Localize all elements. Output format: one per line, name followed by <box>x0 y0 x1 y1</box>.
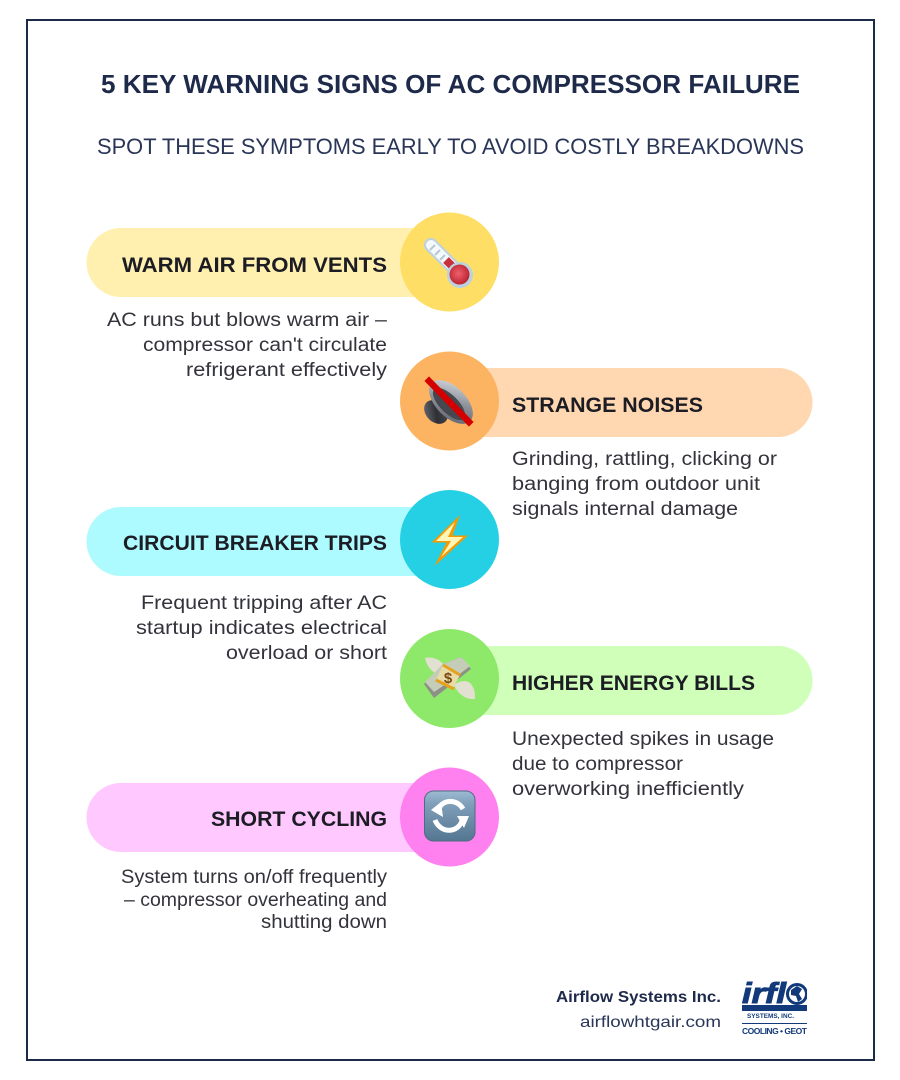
footer: website: airflowhtgair.com <box>580 1014 721 1031</box>
logo: SYSTEMS, INC. <box>747 1014 794 1020</box>
pill: short cycling <box>87 783 449 852</box>
circle: strange noises <box>400 352 499 450</box>
circle: short cycling <box>400 768 499 866</box>
text: strange noises description: banging from outdoor unit <box>512 474 761 495</box>
text: short cycling description <box>121 867 388 933</box>
panel: short cycling <box>87 768 499 933</box>
logo: COOLING • GEOT <box>742 1026 808 1036</box>
pill: circuit breaker <box>87 507 449 576</box>
text: circuit breaker description: overload or short <box>226 643 388 664</box>
pill: strange noises <box>449 368 813 437</box>
icon: refresh arrows <box>424 791 475 841</box>
heading: short cycling: SHORT CYCLING <box>211 808 387 831</box>
icon: muted speaker <box>419 372 481 432</box>
text: short cycling description: shutting down <box>261 912 387 933</box>
heading: strange noises: STRANGE NOISES <box>512 394 703 417</box>
text: energy bills description: Unexpected spikes in usage <box>512 729 774 750</box>
text: circuit breaker description: startup indicates electrical <box>136 618 387 639</box>
panel: circuit breaker trips <box>87 490 499 664</box>
text: warm air description: compressor can't circulate <box>143 335 387 356</box>
subtitle: SPOT THESE SYMPTOMS EARLY TO AVOID COSTLY BREAKDOWNS <box>97 134 804 159</box>
icon: lightning bolt <box>432 515 468 566</box>
panel: warm air from vents <box>87 212 499 381</box>
icon: money with wings: $ <box>444 670 453 687</box>
pill: energy bills <box>449 646 813 715</box>
panel: strange noises <box>400 352 813 520</box>
circle: circuit breaker <box>400 490 499 589</box>
text: short cycling description: System turns on/off frequently <box>121 867 388 888</box>
pill: warm air <box>87 228 449 297</box>
text: warm air description: refrigerant effectively <box>186 360 388 381</box>
logo <box>742 982 807 1034</box>
text: warm air description <box>107 310 388 381</box>
text: circuit breaker description <box>136 593 388 664</box>
circle: warm air <box>400 212 499 312</box>
panel: higher energy bills <box>400 629 813 800</box>
heading: energy bills: HIGHER ENERGY BILLS <box>512 672 755 695</box>
footer: company name: Airflow Systems Inc. <box>556 989 721 1006</box>
heading: warm air: WARM AIR FROM VENTS <box>122 254 387 277</box>
logo: irfl <box>742 978 787 1010</box>
icon: thermometer <box>430 245 473 288</box>
text: energy bills description <box>512 729 774 800</box>
text: strange noises description <box>512 449 778 520</box>
circle: energy bills <box>400 629 499 728</box>
text: circuit breaker description: Frequent tripping after AC <box>141 593 387 614</box>
text: short cycling description: – compressor overheating and <box>124 890 387 911</box>
heading: circuit breaker: CIRCUIT BREAKER TRIPS <box>123 532 387 555</box>
text: strange noises description: signals internal damage <box>512 499 738 520</box>
text: strange noises description: Grinding, rattling, clicking or <box>512 449 778 470</box>
title: 5 KEY WARNING SIGNS OF AC COMPRESSOR FAILURE <box>101 69 800 99</box>
text: energy bills description: due to compressor <box>512 754 684 775</box>
icon: money with wings <box>424 657 475 699</box>
text: warm air description: AC runs but blows warm air – <box>107 310 387 331</box>
text: energy bills description: overworking inefficiently <box>512 779 745 800</box>
